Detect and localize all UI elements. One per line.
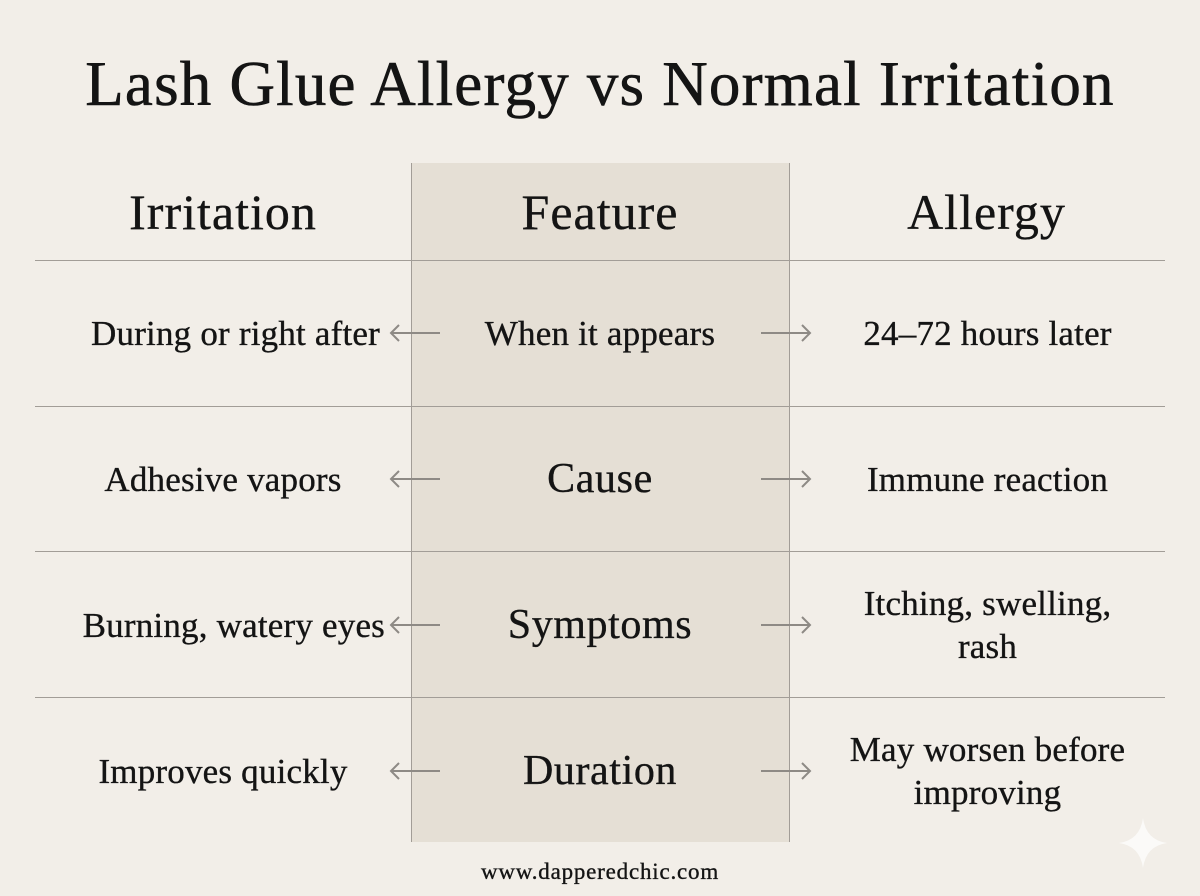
text: When it appears [485,314,715,352]
heading: allergy: Allergy [907,184,1066,240]
icon: sparkle [1119,818,1167,868]
heading: feature: Feature [522,184,678,240]
heading: irritation: Irritation [129,184,317,240]
text: Duration [523,748,677,794]
text: 24–72 hours later [863,314,1112,352]
text: Itching, swelling, [864,584,1111,623]
text: Immune reaction [867,460,1108,498]
row 3: Burning, watery eyes [83,606,385,644]
text: Symptoms [508,602,692,648]
panel: feature column [411,163,790,842]
title: Lash Glue Allergy vs Normal Irritation [85,49,1115,119]
text: Cause [547,456,653,502]
row 2: Adhesive vapors [104,460,342,498]
text: improving [914,773,1061,812]
text: rash [958,627,1017,666]
row 4: Improves quickly [98,752,348,790]
footer: www.dapperedchic.com [481,859,719,884]
text: May worsen before [850,730,1125,769]
row 1: During or right after [91,314,380,352]
